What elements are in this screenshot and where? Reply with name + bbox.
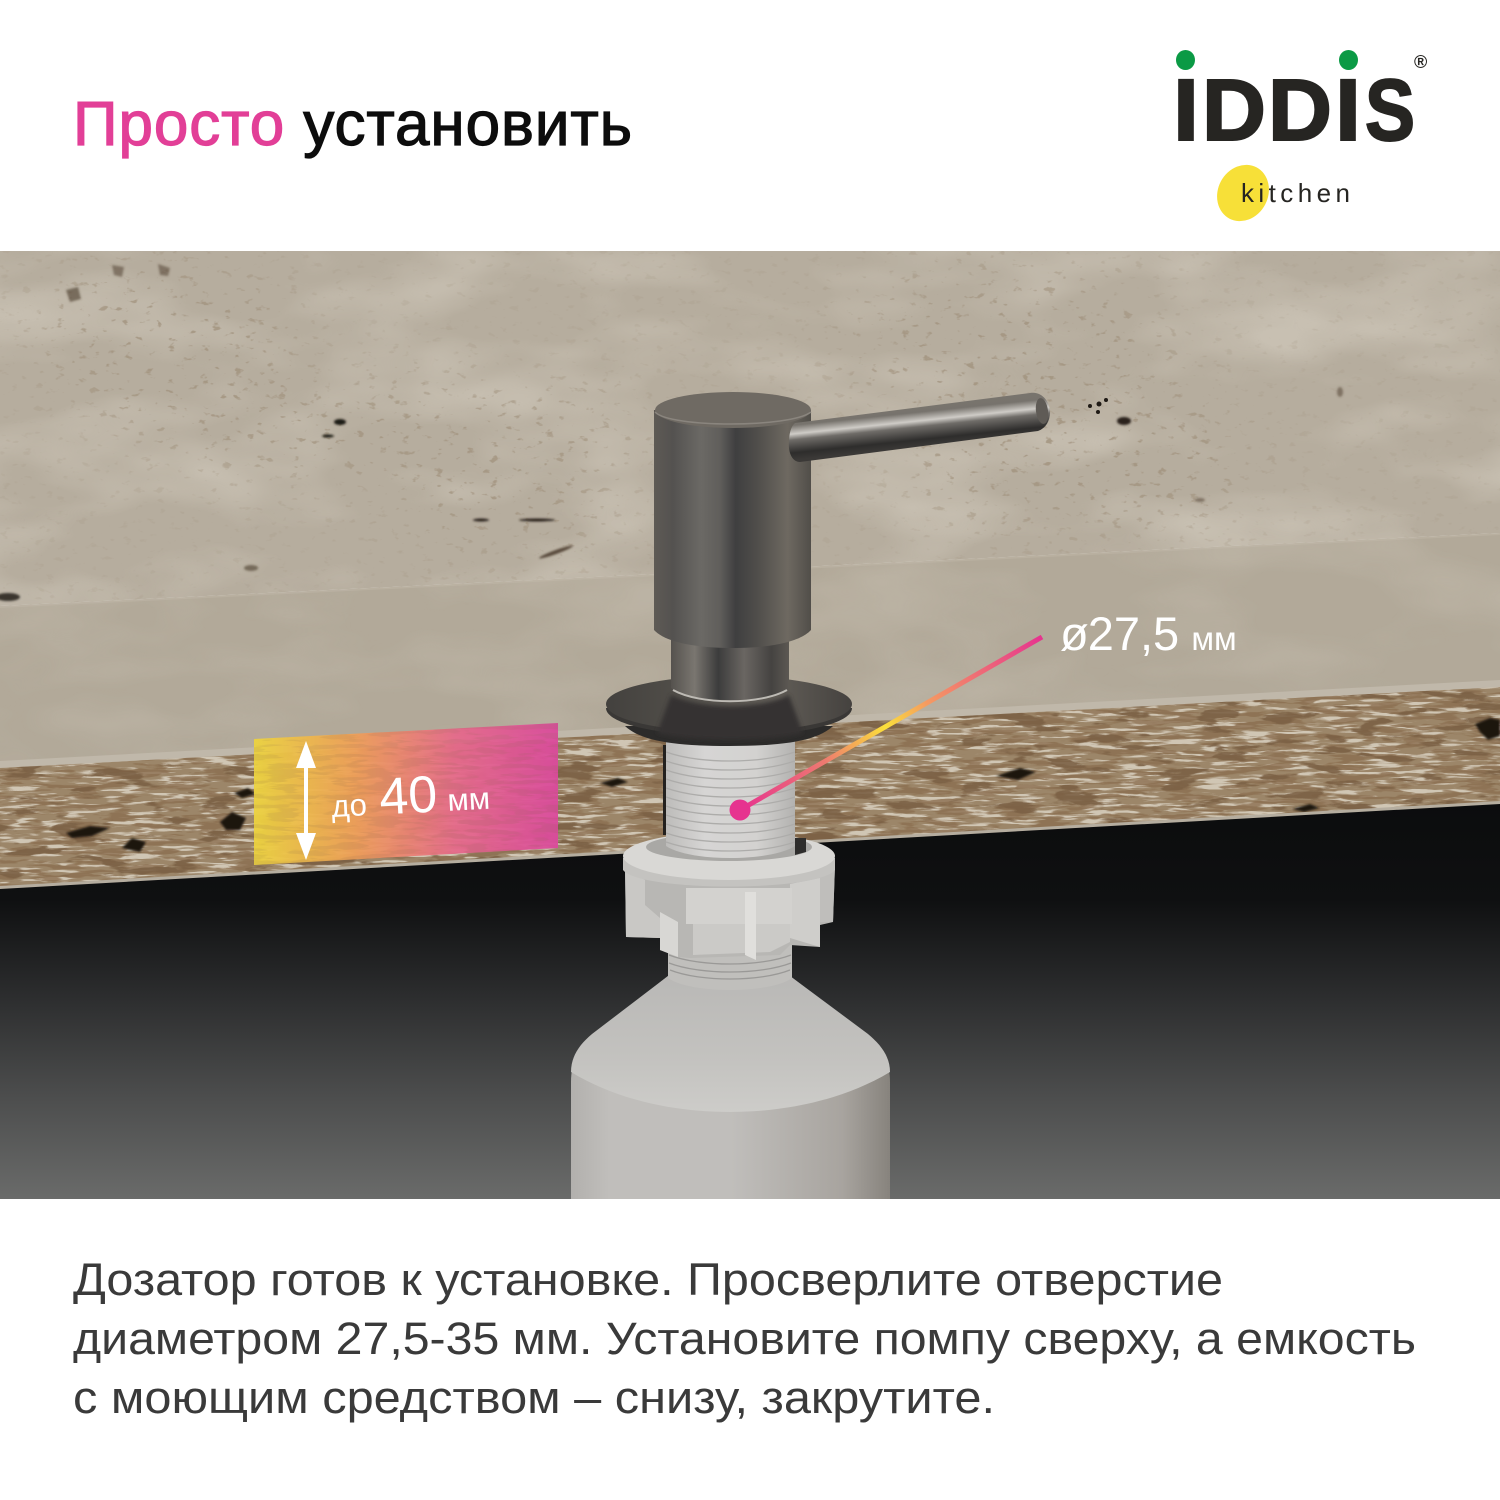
bottle body bbox=[571, 976, 890, 1199]
pointer line bbox=[740, 637, 1042, 810]
stem shadow edge bbox=[663, 745, 666, 835]
registered mark: ® bbox=[1414, 52, 1427, 72]
cap rim bbox=[655, 412, 811, 424]
neck cylinder bbox=[671, 640, 789, 700]
dispenser flange bbox=[606, 676, 852, 746]
left mid fin bbox=[660, 912, 678, 957]
small pit cluster bbox=[1088, 398, 1108, 414]
nut backing bbox=[625, 865, 835, 958]
yellow blob bbox=[1207, 156, 1279, 230]
lock nut bbox=[623, 832, 835, 960]
dispenser neck bbox=[671, 640, 789, 701]
pump lever bbox=[789, 393, 1050, 462]
hand placed stone pits bbox=[0, 264, 1343, 601]
central fin bbox=[745, 892, 756, 960]
chip texture over block bbox=[254, 720, 558, 870]
flange shadow bbox=[657, 695, 803, 740]
body top cap bbox=[655, 392, 811, 428]
ring top bbox=[623, 832, 835, 880]
opening shadow bbox=[795, 838, 806, 855]
countertop top surface bbox=[0, 251, 1500, 611]
threaded stem bbox=[663, 740, 795, 858]
thickness highlight block bbox=[254, 720, 558, 870]
pointer dot bbox=[730, 800, 750, 820]
logo wordmark: I bbox=[1335, 62, 1361, 159]
lever tip bbox=[1034, 397, 1050, 425]
soap bottle bbox=[571, 945, 890, 1199]
chipboard lower lip bbox=[0, 801, 1500, 889]
white band under the scene bbox=[0, 1199, 1500, 1500]
title: Просто установить bbox=[73, 90, 632, 159]
line 1: Дозатор готов к установке. Просверлите отверстие bbox=[73, 1254, 1223, 1305]
dispenser body bbox=[654, 392, 811, 648]
upper core bbox=[686, 888, 792, 924]
bottle shoulder bbox=[571, 976, 890, 1112]
dark chips bbox=[66, 718, 1500, 852]
logo wordmark: S bbox=[1365, 62, 1415, 159]
neck ring bbox=[673, 690, 787, 701]
logo wordmark: I bbox=[1173, 62, 1199, 159]
right mid fin bbox=[790, 878, 820, 947]
diameter pointer bbox=[730, 637, 1042, 820]
bottle neck bbox=[668, 945, 792, 990]
green dots bbox=[1176, 50, 1358, 70]
kitchen label: kitchen bbox=[1241, 178, 1350, 208]
gradient block bbox=[254, 723, 558, 865]
logo wordmark bbox=[1173, 62, 1415, 159]
diameter label: ø27,5 мм bbox=[1060, 607, 1237, 660]
logo wordmark: D bbox=[1202, 62, 1266, 159]
body cylinder bbox=[654, 410, 811, 648]
flange disc edge bbox=[606, 708, 852, 736]
light bevel bbox=[0, 680, 1500, 768]
ring opening bbox=[646, 833, 812, 861]
ring collar bbox=[623, 858, 835, 886]
stem threads bbox=[666, 752, 795, 851]
flange top bbox=[606, 676, 852, 732]
thickness label: до40 мм bbox=[330, 763, 491, 829]
photo scene: countertop and dispenser bbox=[0, 251, 1500, 1199]
stem body bbox=[666, 740, 795, 858]
dark cabinet interior bbox=[0, 800, 1500, 1199]
chipboard edge bbox=[0, 680, 1500, 890]
lower core bbox=[693, 924, 790, 955]
edge line of top surface bbox=[0, 533, 1500, 608]
description text bbox=[73, 1254, 1416, 1423]
countertop front face bbox=[0, 530, 1500, 770]
IDDIS kitchen logo bbox=[1173, 50, 1427, 230]
line 3: с моющим средством – снизу, закрутите. bbox=[73, 1372, 995, 1423]
logo wordmark: D bbox=[1268, 62, 1332, 159]
line 2: диаметром 27,5-35 мм. Установите помпу сверху, а емкость bbox=[73, 1313, 1416, 1364]
flange underside bbox=[625, 726, 833, 746]
outer fin bbox=[625, 868, 660, 938]
double arrow bbox=[296, 741, 316, 860]
lever shaft bbox=[789, 393, 1050, 462]
right fin bbox=[815, 865, 835, 922]
